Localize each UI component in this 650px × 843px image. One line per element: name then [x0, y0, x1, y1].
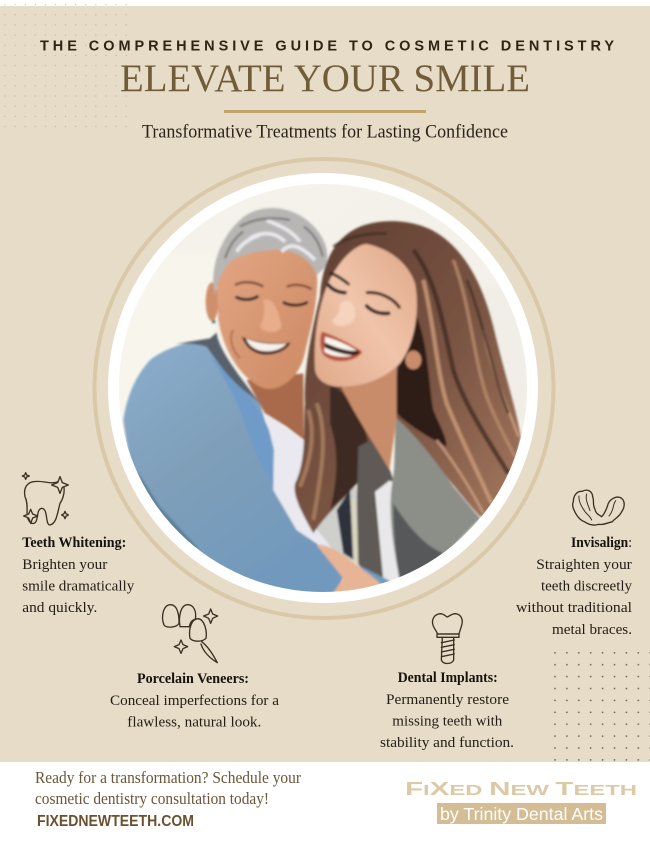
logo: Fixed New Teeth: by Trinity Dental Arts — [440, 804, 603, 824]
young neck — [340, 367, 397, 470]
text: dental implants: Dental Implants: — [398, 670, 498, 686]
feature: invisalign: Straighten your — [536, 557, 632, 573]
text: invisalign: Invisalign: — [571, 535, 632, 551]
older woman body — [123, 333, 343, 597]
feature: dental implants — [380, 614, 514, 751]
title rule — [224, 110, 426, 113]
older hair — [213, 208, 327, 295]
photo: two women embracing — [119, 184, 527, 592]
outer tan ring — [94, 159, 554, 618]
header — [40, 38, 614, 142]
footer call to action — [35, 768, 301, 830]
icon: veneers — [163, 605, 218, 663]
feature: teeth whitening: and quickly. — [22, 600, 97, 616]
footer call to action: cosmetic dentistry consultation today! — [35, 789, 269, 808]
feature: porcelain veneers: Conceal imperfections for a — [110, 693, 279, 709]
eyebrow heading: THE COMPREHENSIVE GUIDE TO COSMETIC DENTISTRY — [40, 38, 614, 54]
footer call to action: FIXEDNEWTEETH.COM — [37, 813, 194, 830]
hand — [358, 564, 391, 584]
feature: teeth whitening: smile dramatically — [22, 578, 135, 594]
dot pattern top left — [0, 0, 131, 132]
logo: Fixed New Teeth — [405, 779, 637, 824]
logo: Fixed New Teeth: F IX ED N EW T EETH — [405, 779, 637, 799]
feature: invisalign — [516, 490, 632, 638]
feature: dental implants: missing teeth with — [392, 714, 503, 730]
subtitle: Transformative Treatments for Lasting Confidence — [142, 122, 508, 142]
text: porcelain veneers: Porcelain Veneers: — [137, 671, 249, 687]
older features — [235, 282, 312, 289]
icon: implant — [432, 614, 462, 663]
feature: invisalign: teeth discreetly — [541, 578, 632, 594]
feature: dental implants: Permanently restore — [386, 692, 509, 708]
hair strands — [423, 280, 492, 503]
icon: clear aligner — [573, 490, 624, 525]
feature: porcelain veneers: flawless, natural look. — [127, 714, 261, 730]
text: teeth whitening: Teeth Whitening: — [22, 535, 126, 551]
white photo frame — [108, 173, 538, 603]
title: ELEVATE YOUR SMILE — [120, 56, 530, 100]
icon: sparkling tooth — [22, 473, 68, 525]
dot pattern bottom right — [549, 647, 650, 766]
feature: dental implants: stability and function. — [380, 735, 514, 751]
feature: teeth whitening — [22, 473, 135, 616]
feature: teeth whitening: Brighten your — [22, 557, 107, 573]
young face — [405, 351, 421, 369]
feature: invisalign: metal braces. — [552, 622, 632, 638]
young clothes — [355, 437, 393, 580]
feature: porcelain veneers — [110, 605, 279, 730]
footer call to action: Ready for a transformation? Schedule your — [35, 768, 301, 787]
feature: invisalign: without traditional — [516, 600, 632, 616]
young hair silhouette — [295, 221, 521, 533]
